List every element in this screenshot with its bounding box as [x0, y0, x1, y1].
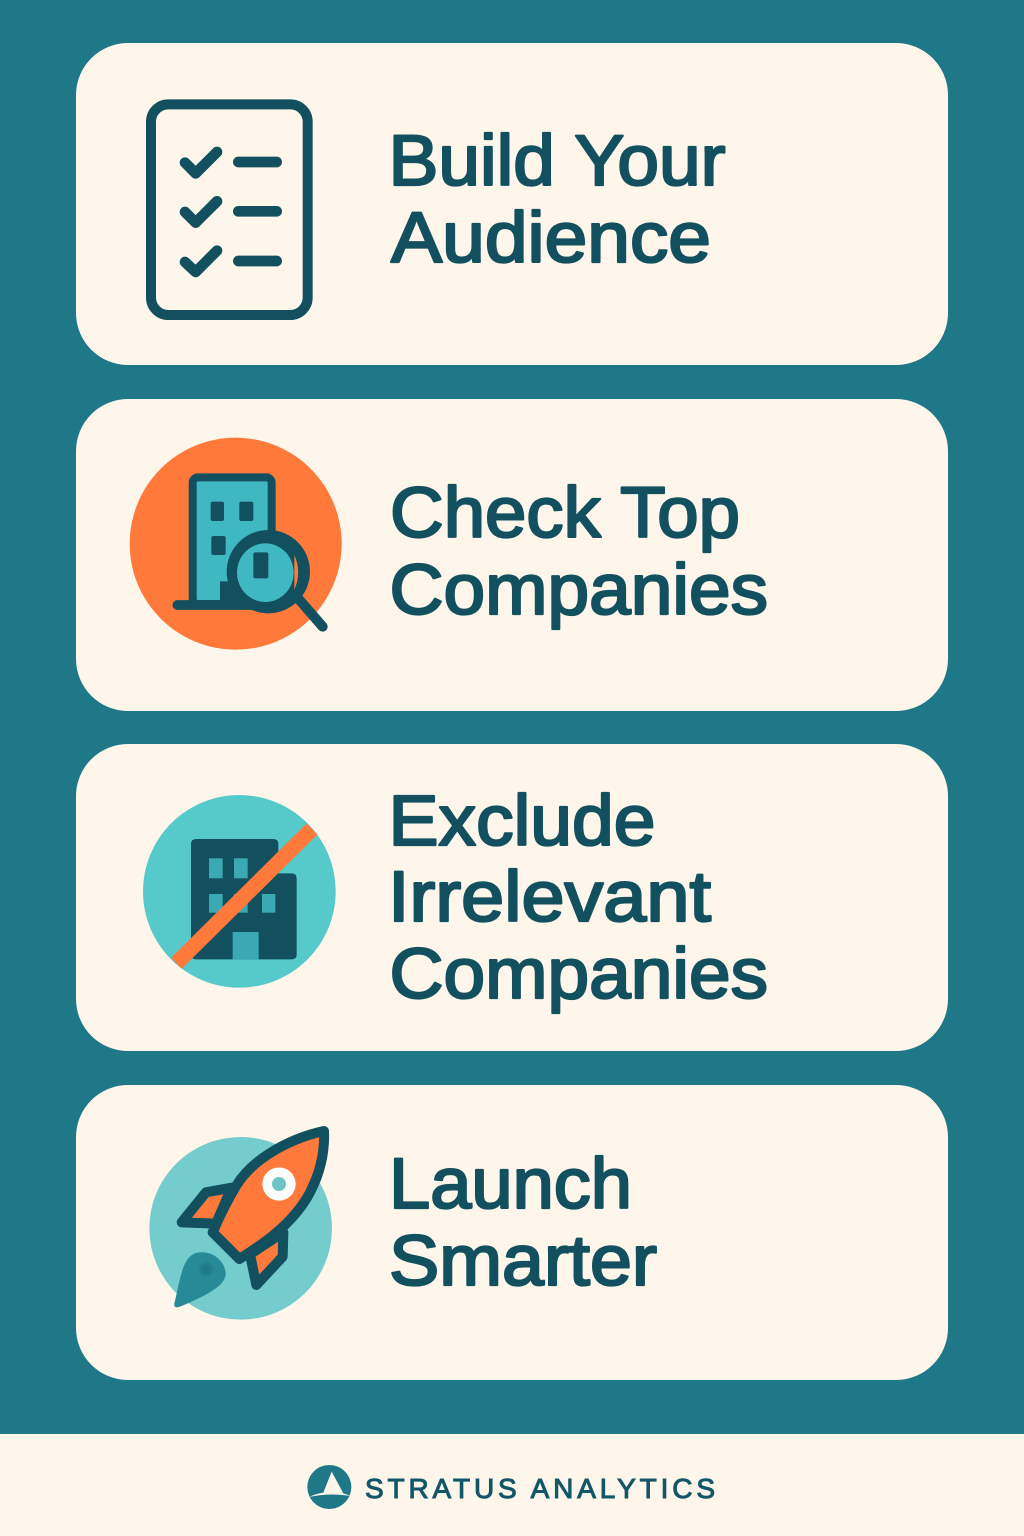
- logo: stratus analytics mark: [307, 1465, 351, 1509]
- heading: build your audience: [388, 122, 726, 278]
- heading: check top companies: Companies: [390, 551, 768, 630]
- icon: checklist: [151, 104, 308, 315]
- heading: exclude irrelevant companies: Irrelevant: [388, 858, 711, 937]
- footer bar: [0, 1434, 1024, 1536]
- panel: launch smarter: [76, 1085, 948, 1380]
- icon: building crossed out: [143, 795, 336, 988]
- heading: launch smarter: Smarter: [389, 1222, 657, 1301]
- heading: exclude irrelevant companies: [388, 782, 768, 1014]
- heading: launch smarter: [389, 1145, 657, 1301]
- brand name: STRATUS ANALYTICS: [365, 1473, 715, 1504]
- icon: rocket: [149, 1131, 332, 1320]
- panel: check top companies: [76, 399, 948, 711]
- heading: build your audience: Build Your: [388, 122, 726, 201]
- panel: build your audience: [76, 43, 948, 365]
- panel: exclude irrelevant companies: [76, 744, 948, 1051]
- heading: exclude irrelevant companies: Companies: [390, 935, 768, 1014]
- heading: build your audience: Audience: [391, 199, 711, 278]
- heading: check top companies: [390, 474, 768, 630]
- heading: launch smarter: Launch: [389, 1145, 632, 1224]
- icon: building with magnifier: [130, 438, 342, 650]
- heading: check top companies: Check Top: [390, 474, 740, 553]
- heading: exclude irrelevant companies: Exclude: [388, 782, 656, 861]
